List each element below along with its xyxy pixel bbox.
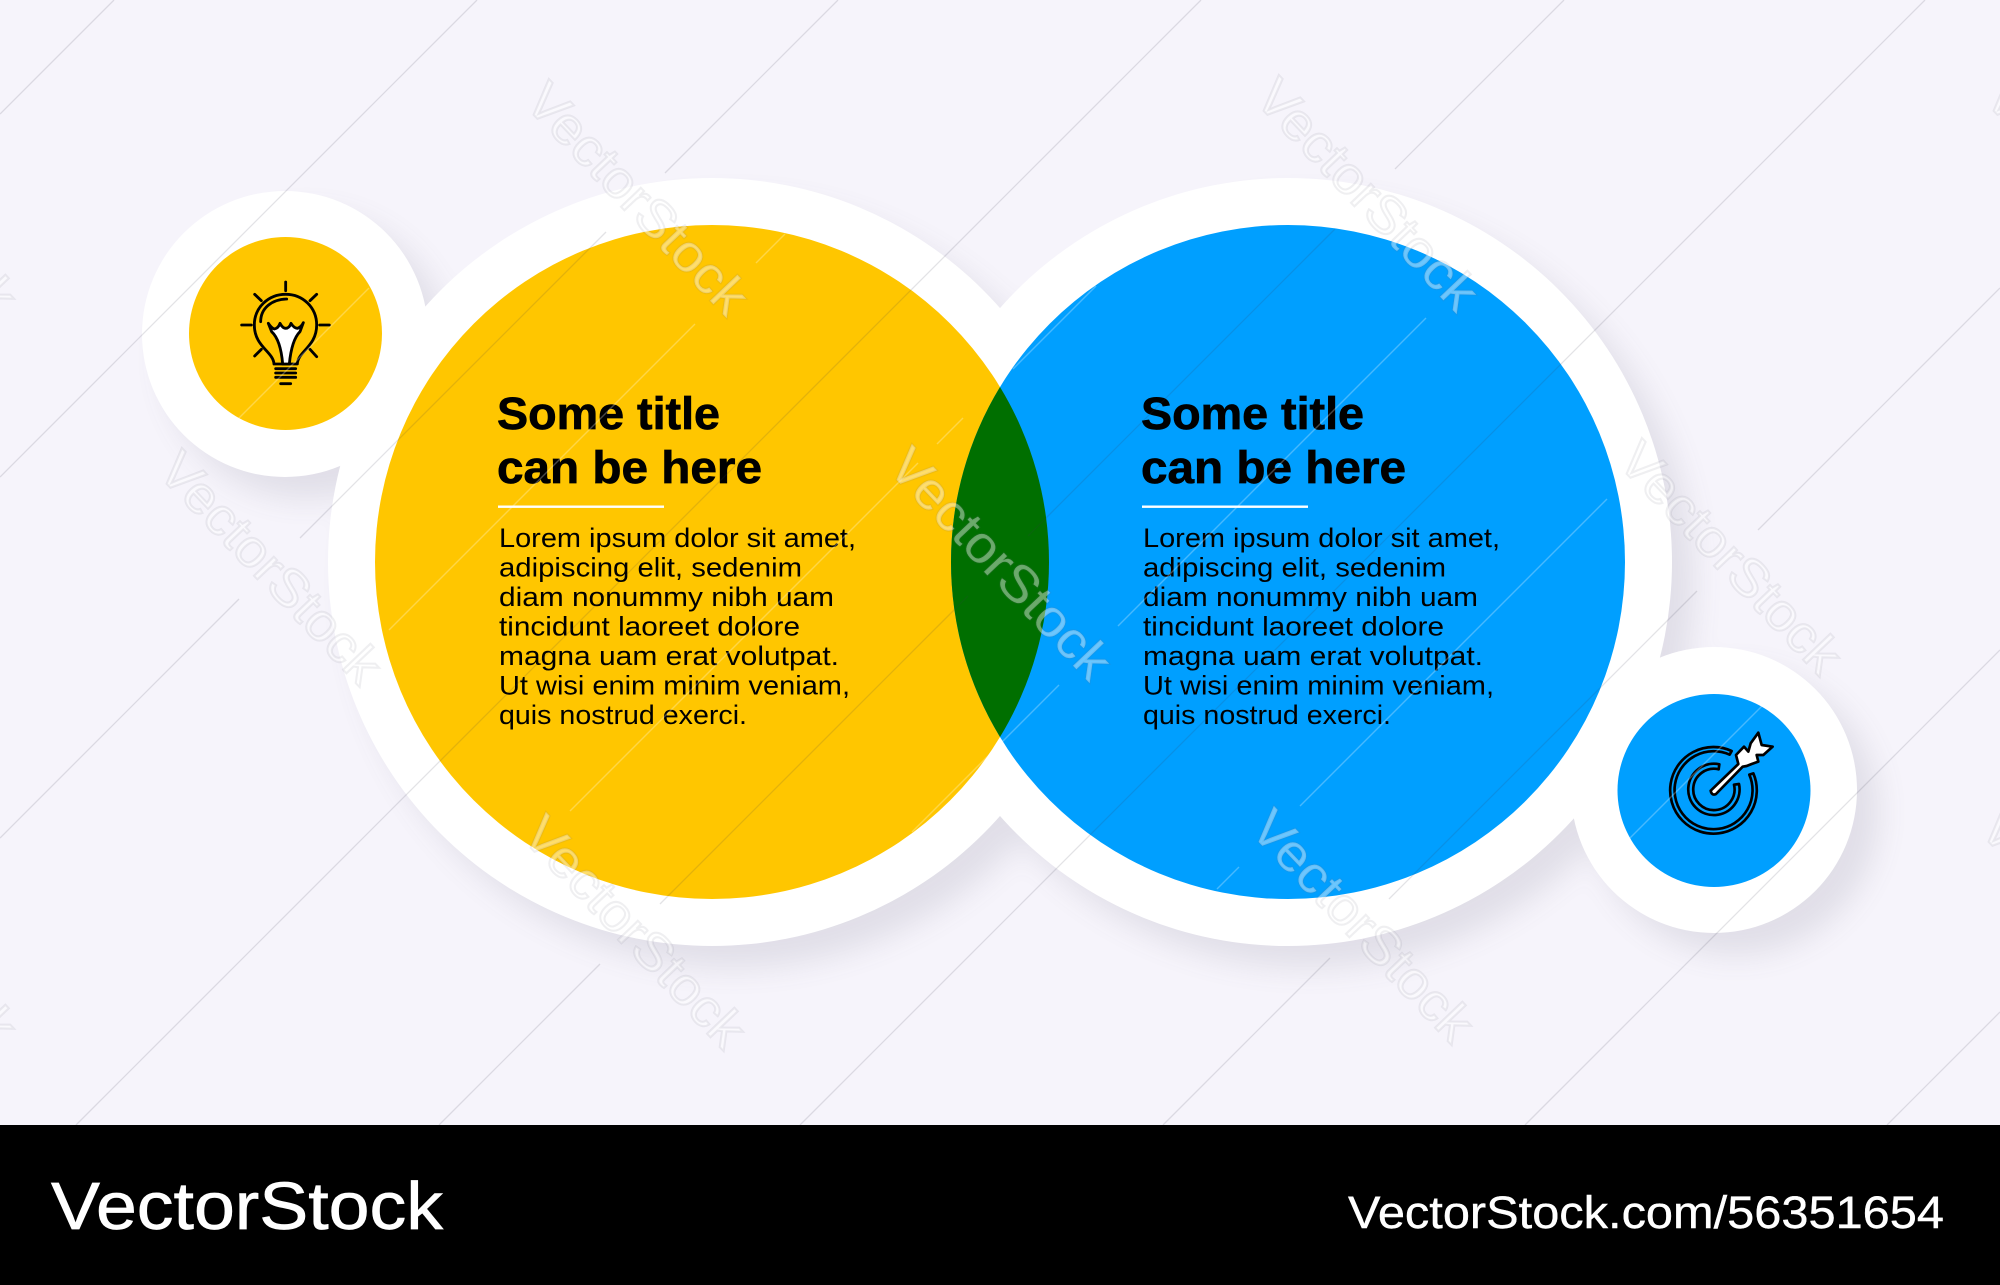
- icon: target with arrow: [1670, 733, 1773, 834]
- heading: blue circle: [1141, 388, 1406, 493]
- footer url: VectorStock.com/56351654: [1348, 1187, 1944, 1238]
- body copy: yellow circle: [499, 523, 856, 730]
- body copy: blue circle: diam nonummy nibh uam: [1143, 582, 1478, 612]
- body copy: blue circle: [1143, 523, 1500, 730]
- watermarks: VectorStock: [877, 437, 1124, 692]
- watermarks: VectorStock: [514, 72, 761, 327]
- body copy: blue circle: magna uam erat volutpat.: [1143, 641, 1483, 671]
- text block: yellow circle: [497, 388, 856, 730]
- body copy: yellow circle: tincidunt laoreet dolore: [499, 612, 800, 642]
- watermarks: VectorStock: [511, 805, 758, 1060]
- body copy: yellow circle: adipiscing elit, sedenim: [499, 552, 802, 582]
- text block: blue circle: [1141, 388, 1500, 730]
- panel: blue circle: [951, 225, 1625, 899]
- white backing of the circles: [142, 178, 1857, 946]
- small yellow circle: [189, 237, 382, 430]
- body copy: yellow circle: Ut wisi enim minim veniam,: [499, 670, 850, 700]
- body copy: yellow circle: magna uam erat volutpat.: [499, 641, 839, 671]
- panel: yellow circle: [375, 225, 1049, 899]
- watermarks: VectorStock: [1607, 431, 1854, 686]
- icon: light bulb: [242, 282, 329, 384]
- heading: blue circle: Some title: [1141, 388, 1364, 439]
- watermarks: [0, 68, 2000, 1060]
- body copy: blue circle: adipiscing elit, sedenim: [1143, 552, 1446, 582]
- body copy: blue circle: quis nostrud exerci.: [1143, 700, 1391, 730]
- footer bar: [0, 1125, 2000, 1285]
- soft shadow below the circles: [164, 200, 1879, 968]
- heading: yellow circle: can be here: [497, 442, 762, 493]
- heading: yellow circle: Some title: [497, 388, 720, 439]
- watermarks: VectorStock: [147, 441, 394, 696]
- body copy: yellow circle: diam nonummy nibh uam: [499, 582, 834, 612]
- overlap lens: [951, 387, 1049, 737]
- small blue circle: [1618, 694, 1810, 887]
- body copy: blue circle: Ut wisi enim minim veniam,: [1143, 670, 1494, 700]
- body copy: blue circle: tincidunt laoreet dolore: [1143, 612, 1444, 642]
- footer logo: VectorStock: [51, 1169, 444, 1244]
- body copy: yellow circle: quis nostrud exerci.: [499, 700, 747, 730]
- heading: blue circle: can be here: [1141, 442, 1406, 493]
- body copy: blue circle: Lorem ipsum dolor sit amet,: [1143, 523, 1500, 553]
- heading: yellow circle: [497, 388, 762, 493]
- underline: blue circle: [1142, 506, 1308, 508]
- body copy: yellow circle: Lorem ipsum dolor sit amet,: [499, 523, 856, 553]
- watermarks: VectorStock: [1244, 68, 1491, 323]
- underline: yellow circle: [498, 506, 664, 508]
- watermarks: VectorStock: [1239, 799, 1486, 1054]
